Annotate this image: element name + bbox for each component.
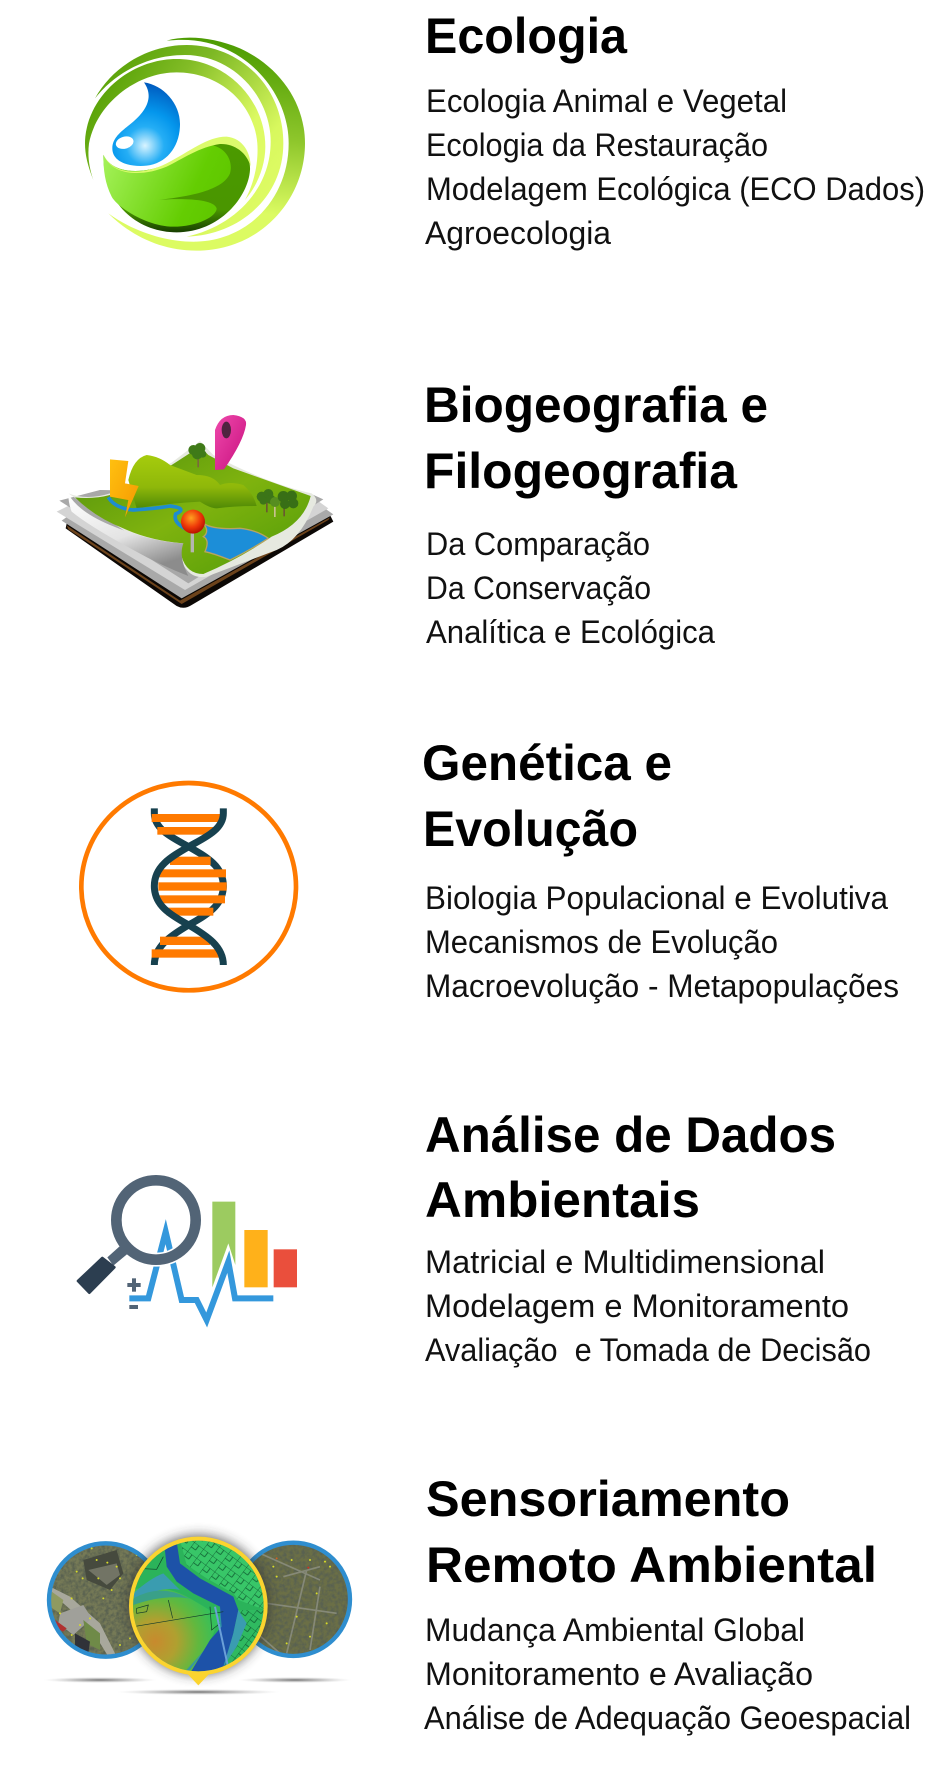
list: Biogeografia topics: Da Comparação [426,526,650,562]
icon part: river and lake [108,497,205,530]
list: Genética topics: Mecanismos de Evolução [425,924,778,960]
list: Sensoriamento topics: Monitoramento e Avaliação [425,1656,813,1692]
list: Ecologia topics: Ecologia Animal e Vegetal [426,83,787,119]
list: Biogeografia topics: Analítica e Ecológica [426,614,715,650]
icon part: right satellite circle [237,1543,350,1657]
panel: Biogeografia e Filogeografia [57,377,768,650]
list: Sensoriamento topics: Mudança Ambiental Global [425,1612,805,1648]
panel: Genética e Evolução [81,735,899,1004]
icon part: lightning bolt [110,459,139,517]
icon part: bars [212,1202,297,1287]
list: Ecologia topics [425,83,925,251]
heading: Genética e Evolução [422,735,672,857]
icon: magnifier with pulse line and bars [78,1180,297,1320]
icon part: pink location marker [215,415,246,470]
icon part: magnifying glass [78,1180,196,1293]
list: Genética topics: Macroevolução - Metapopulações [425,968,899,1004]
heading: Análise de Dados Ambientais: Ambientais [425,1172,700,1228]
icon part: left satellite circle [48,1543,163,1658]
icon part: trees [188,443,298,517]
heading: Genética e Evolução: Evolução [423,801,638,857]
list: Genética topics: Biologia Populacional e Evolutiva [425,880,888,916]
heading: Biogeografia e Filogeografia: Filogeografia [424,443,738,499]
list: Análise topics [425,1244,871,1368]
list: Ecologia topics: Modelagem Ecológica (ECO Dados) [426,171,925,207]
icon: three satellite map circles [43,1536,352,1695]
list: Análise topics: Avaliação e Tomada de Decisão [425,1332,871,1368]
icon: water drop and leaf swirl [85,38,305,251]
heading: Biogeografia e Filogeografia [424,377,768,499]
heading: Análise de Dados Ambientais [425,1107,836,1228]
list: Genética topics [425,880,899,1004]
heading: Biogeografia e Filogeografia: Biogeografia e [424,377,768,433]
icon part: plus and minus signs [127,1278,141,1309]
list: Biogeografia topics: Da Conservação [426,570,651,606]
icon part: pulse line [129,1232,273,1320]
icon part: leaf [103,142,250,232]
list: Sensoriamento topics [424,1612,911,1736]
list: Ecologia topics: Ecologia da Restauração [426,127,768,163]
panel: Ecologia [85,8,925,251]
icon part: red pin [191,532,194,552]
list: Análise topics: Matricial e Multidimensional [425,1244,825,1280]
icon: DNA helix in orange circle [81,783,296,990]
icon part: ground shadows [43,1677,352,1695]
icon part: hills [128,455,257,508]
panel: Análise de Dados Ambientais [78,1107,871,1368]
list: Análise topics: Modelagem e Monitoramento [425,1288,849,1324]
panel: Sensoriamento Remoto Ambiental [43,1471,911,1736]
heading: Sensoriamento Remoto Ambiental: Sensoriamento [426,1471,790,1527]
list: Sensoriamento topics: Análise de Adequação Geoespacial [424,1700,911,1736]
heading: Sensoriamento Remoto Ambiental: Remoto Ambiental [426,1537,877,1593]
icon: 3D map book [57,415,333,608]
heading: Ecologia: Ecologia [425,8,628,64]
heading: Sensoriamento Remoto Ambiental [426,1471,877,1593]
list: Ecologia topics: Agroecologia [425,215,611,251]
icon part: water drop [112,82,180,166]
icon part: central elevation map circle [131,1539,266,1685]
heading: Genética e Evolução: Genética e [422,735,672,791]
list: Biogeografia topics [426,526,715,650]
icon part: central glow shadow [129,1536,268,1674]
heading: Análise de Dados Ambientais: Análise de Dados [425,1107,836,1163]
